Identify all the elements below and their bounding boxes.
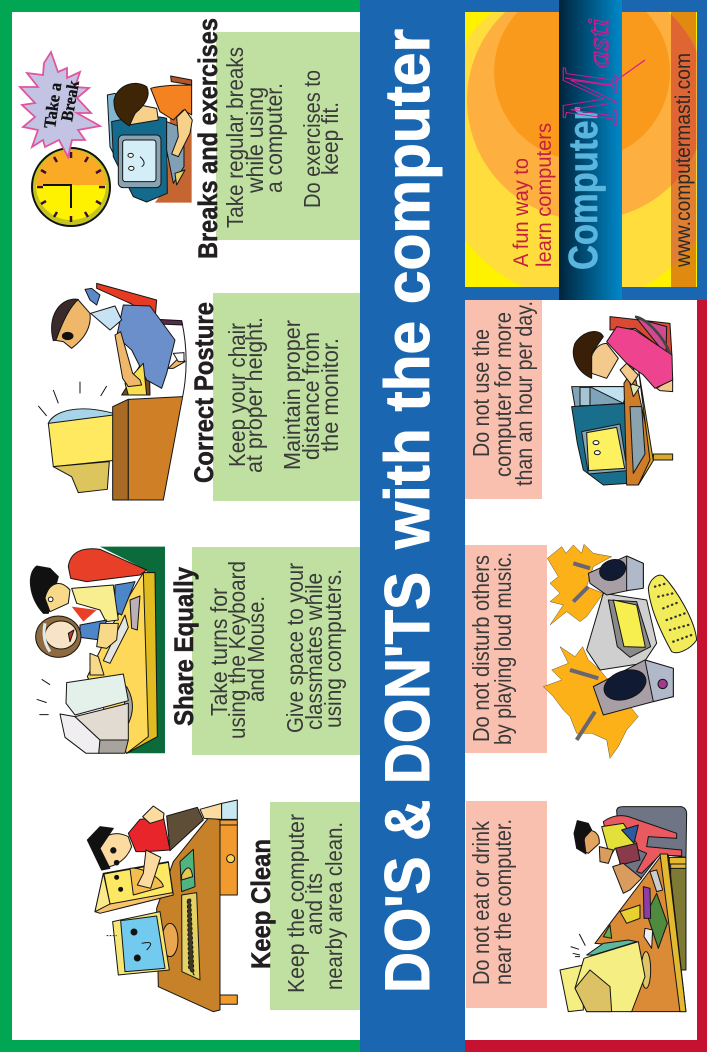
icon: take a break starburst — [20, 52, 100, 157]
panel: correct posture — [38, 283, 360, 501]
text: take a break — [40, 79, 83, 130]
illustration: girl rubbing tired eyes at computer — [572, 317, 673, 485]
text: sharing tips: using computers. — [320, 569, 346, 728]
illustration: boy at blue monitor — [107, 76, 192, 203]
text: food and drink: Do not eat or drink — [468, 821, 494, 985]
text: take regular breaks: Do exercises to — [299, 70, 325, 208]
text: posture tips: distance from — [298, 332, 324, 460]
title: dos and donts with the computer: with the computer — [373, 29, 443, 550]
text: posture tips: the monitor. — [317, 338, 343, 452]
text: time limit: than an hour per day. — [511, 301, 537, 486]
title band — [360, 0, 707, 1052]
wordmark: masti: asti — [582, 18, 615, 68]
heading: correct posture: Correct Posture — [189, 302, 219, 483]
website url: www.computermasti.com — [672, 53, 695, 268]
tagline: A fun way to — [510, 158, 533, 267]
text: take regular breaks: Take regular breaks — [222, 47, 248, 228]
text: time limit — [468, 301, 537, 486]
illustration: girl with correct posture — [38, 283, 186, 500]
text: posture tips: Keep your chair — [224, 323, 250, 467]
illustration: two children sharing a computer — [30, 547, 165, 753]
panel: computer masti logo — [465, 0, 707, 300]
logo band — [544, 0, 645, 300]
text: posture tips: at proper height. — [241, 317, 267, 473]
wordmark: masti — [544, 18, 645, 125]
text: take a break: Take a — [40, 81, 65, 130]
text: sharing tips: using the Keyboard — [224, 561, 250, 739]
panel: keep clean — [87, 800, 360, 1012]
text: take regular breaks — [222, 47, 343, 228]
wordmark: masti: M — [544, 67, 634, 125]
title: dos and donts with the computer — [373, 29, 443, 993]
illustration: loud speakers and monitor — [543, 544, 697, 758]
title: dos and donts with the computer: DO'S & DON'TS — [373, 572, 443, 993]
text: cleaning tips: and its — [301, 873, 327, 935]
tagline: learn computers — [533, 123, 556, 267]
text: posture tips — [224, 317, 343, 473]
text: sharing tips: and Mouse. — [243, 596, 269, 702]
text: take regular breaks: keep fit. — [317, 102, 343, 175]
text: sharing tips: classmates while — [301, 573, 327, 730]
text: loud music — [468, 552, 516, 745]
frame: red border — [465, 300, 707, 1052]
text: food and drink — [468, 819, 516, 985]
text: take a break: Break — [57, 79, 83, 123]
heading: keep clean: Keep Clean — [246, 839, 276, 969]
text: cleaning tips: nearby area clean. — [321, 822, 347, 990]
panel: do not eat or drink — [466, 801, 687, 1012]
icon: clock — [32, 148, 110, 226]
text: time limit: Do not use the — [468, 329, 494, 457]
text: cleaning tips — [283, 814, 347, 993]
panel: share equally — [30, 547, 360, 755]
panel: breaks and exercises — [20, 18, 360, 259]
text: loud music: Do not disturb others — [468, 555, 494, 742]
frame: green border — [0, 0, 360, 1052]
text: loud music: by playing loud music. — [490, 552, 516, 745]
text: cleaning tips: Keep the computer — [283, 814, 309, 993]
text: food and drink: near the computer. — [490, 819, 516, 985]
illustration: boy cleaning a computer — [87, 800, 237, 1012]
panel: do not play loud music — [465, 544, 697, 758]
heading: share equally: Share Equally — [169, 567, 199, 726]
illustration: boy eating near computer — [560, 807, 687, 1012]
text: sharing tips — [206, 561, 346, 739]
text: sharing tips: Take turns for — [206, 588, 232, 716]
text: take regular breaks: while using — [242, 87, 268, 194]
text: sharing tips: Give space to your — [282, 563, 308, 733]
wordmark: computer: Computer — [560, 107, 606, 270]
text: posture tips: Maintain proper — [279, 320, 305, 470]
text: take regular breaks: a computer. — [261, 83, 287, 193]
panel: do not use for more than an hour — [465, 300, 673, 499]
text: time limit: computer for more — [490, 312, 516, 477]
tagline — [510, 123, 556, 267]
